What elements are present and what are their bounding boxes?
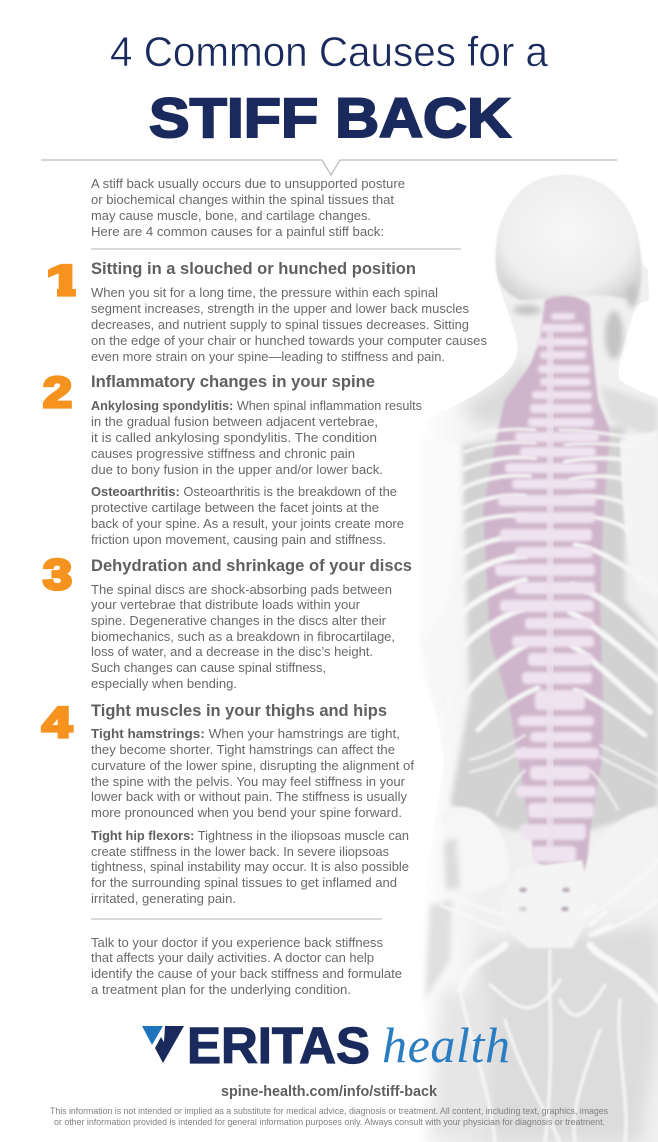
number 4: 4 <box>42 699 72 747</box>
section 3 body <box>91 582 395 691</box>
osteoarthritis: friction upon movement, causing pain and stiffness. <box>91 532 386 547</box>
logo: Veritas Health <box>142 1017 510 1074</box>
disclaimer: or other information provided is intended for general information purposes only. Always consult with your physician for diagnosis or treatment. <box>54 1117 605 1127</box>
tight hamstrings: they become shorter. Tight hamstrings can affect the <box>91 742 395 757</box>
logo mark <box>142 1026 184 1063</box>
body shading <box>420 355 658 1142</box>
closing text: Talk to your doctor if you experience back stiffness <box>91 935 383 950</box>
intro text: may cause muscle, bone, and cartilage changes. <box>91 208 371 223</box>
ankylosing spondylitis: in the gradual fusion between adjacent vertebrae, <box>91 414 378 429</box>
illustration: human back and spine <box>400 175 658 1142</box>
tight hamstrings: the spine with the pelvis. You may feel stiffness in your <box>91 774 406 789</box>
website: spine-health.com/info/stiff-back <box>221 1084 438 1100</box>
section 3 body: especially when bending. <box>91 676 237 691</box>
intro text: Here are 4 common causes for a painful stiff back: <box>91 224 384 239</box>
title line 2: STIFF BACK <box>149 86 511 149</box>
heading 3: Dehydration and shrinkage of your discs <box>91 557 412 575</box>
tight hip flexors: for the surrounding spinal tissues to get inflamed and <box>91 875 397 890</box>
left hip shadow <box>444 838 460 890</box>
section 3 body: The spinal discs are shock-absorbing pads between <box>91 582 392 597</box>
nerves and hip bones <box>435 860 658 1142</box>
ankylosing spondylitis: due to bony fusion in the upper and/or lower back. <box>91 462 383 477</box>
tight hamstrings: curvature of the lower spine, disrupting the alignment of <box>91 758 414 773</box>
health: health <box>382 1017 510 1073</box>
title <box>110 28 549 149</box>
head <box>496 175 641 302</box>
tight hamstrings <box>91 726 414 820</box>
section 3 body: Such changes can cause spinal stiffness, <box>91 660 326 675</box>
tight hip flexors: Tight hip flexors: Tightness in the iliopsoas muscle can <box>91 828 409 843</box>
central spinous column <box>548 330 552 860</box>
number 3: 3 <box>43 551 72 599</box>
section 3 body: biomechanics, such as a breakdown in fibrocartilage, <box>91 629 395 644</box>
wordmark: ERITAS <box>187 1017 370 1074</box>
tight hip flexors: tightness, spinal instability may occur. It is also possible <box>91 859 409 874</box>
number 2: 2 <box>43 369 72 417</box>
pelvis <box>440 806 658 948</box>
divider with notch <box>41 160 617 175</box>
closing text: a treatment plan for the underlying condition. <box>91 982 351 997</box>
section 1 body <box>91 285 487 364</box>
ankylosing spondylitis: it is called ankylosing spondylitis. The condition <box>91 430 377 445</box>
section 1 <box>91 260 487 364</box>
intro text: or biochemical changes within the spinal tissues that <box>91 192 394 207</box>
tight hip flexors: irritated, generating pain. <box>91 891 236 906</box>
section 3 body: spine. Degenerative changes in the discs alter their <box>91 613 387 628</box>
section 3 body: your vertebrae that distribute loads within your <box>91 597 361 612</box>
tight hamstrings: Tight hamstrings: When your hamstrings are tight, <box>91 726 400 741</box>
tight hip flexors <box>91 828 409 906</box>
section 1 body: When you sit for a long time, the pressure within each spinal <box>91 285 438 300</box>
osteoarthritis: back of your spine. As a result, your joints create more <box>91 516 404 531</box>
closing text <box>91 935 402 997</box>
tight hamstrings: lower back with or without pain. The stiffness is usually <box>91 789 407 804</box>
ankylosing spondylitis <box>91 398 422 477</box>
section 4 <box>91 702 414 906</box>
heading 1: Sitting in a slouched or hunched position <box>91 260 416 278</box>
closing text: identify the cause of your back stiffness and formulate <box>91 966 402 981</box>
section 3 <box>91 557 412 691</box>
ankylosing spondylitis: Ankylosing spondylitis: When spinal inflammation results <box>91 398 422 413</box>
number 1: 1 <box>46 257 82 305</box>
closing text: that affects your daily activities. A doctor can help <box>91 950 374 965</box>
title line 1: 4 Common Causes for a <box>110 28 549 75</box>
section 1 body: decreases, and nutrient supply to spinal tissues decreases. Sitting <box>91 317 469 332</box>
section 2 <box>91 373 422 547</box>
osteoarthritis: Osteoarthritis: Osteoarthritis is the breakdown of the <box>91 484 397 499</box>
pink spine band <box>483 296 610 890</box>
osteoarthritis <box>91 484 404 547</box>
heading 2: Inflammatory changes in your spine <box>91 373 375 391</box>
osteoarthritis: protective cartilage between the facet joints at the <box>91 500 379 515</box>
disclaimer <box>50 1106 608 1127</box>
disclaimer: This information is not intended or implied as a substitute for medical advice, diagnosis or treatment. All content, including text, graphics, images <box>50 1106 608 1116</box>
section 1 body: even more strain on your spine—leading to stiffness and pain. <box>91 349 445 364</box>
section 3 body: loss of water, and a decrease in the disc’s height. <box>91 644 373 659</box>
tight hip flexors: create stiffness in the lower back. In severe iliopsoas <box>91 844 389 859</box>
section 1 body: segment increases, strength in the upper and lower back muscles <box>91 301 469 316</box>
body silhouette <box>400 175 658 1142</box>
intro text <box>91 176 405 239</box>
vertebrae <box>495 313 599 862</box>
ankylosing spondylitis: causes progressive stiffness and chronic pain <box>91 446 355 461</box>
neck shadows <box>513 284 637 359</box>
pink neck muscle <box>505 362 542 420</box>
heading 4: Tight muscles in your thighs and hips <box>91 702 387 720</box>
section 1 body: on the edge of your chair or hunched towards your computer causes <box>91 333 487 348</box>
tight hamstrings: more pronounced when you bend your spine forward. <box>91 805 402 820</box>
ribs <box>437 429 658 815</box>
intro text: A stiff back usually occurs due to unsupported posture <box>91 176 405 191</box>
